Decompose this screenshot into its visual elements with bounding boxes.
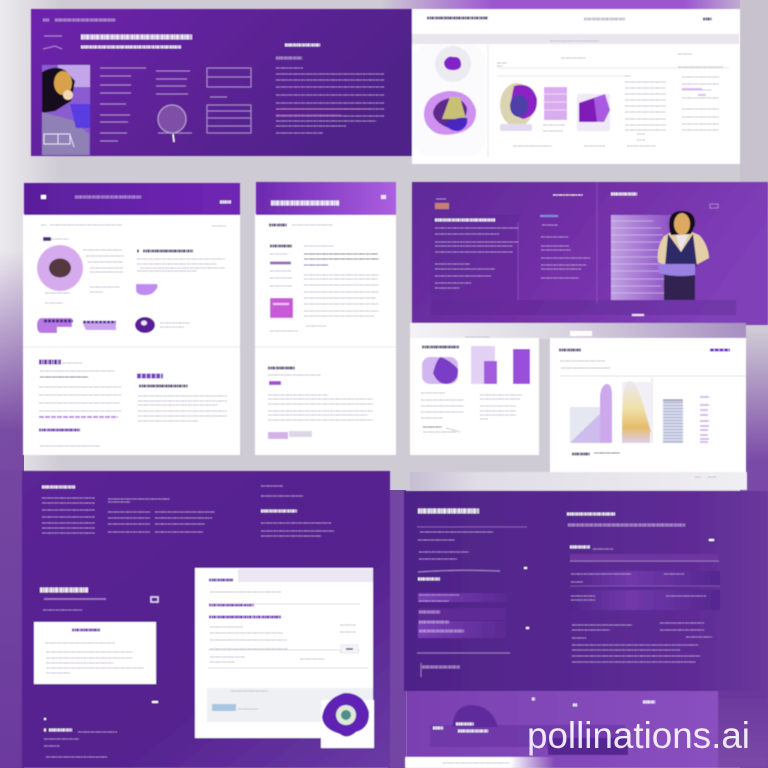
chart: stacked blocks bbox=[543, 87, 567, 131]
form heading bbox=[209, 578, 233, 582]
accent label bbox=[710, 348, 730, 352]
side list bbox=[270, 246, 292, 286]
lavender chips bbox=[268, 431, 312, 439]
figure: person bbox=[658, 211, 709, 300]
card footer bbox=[423, 426, 442, 428]
small tables bbox=[207, 68, 251, 133]
left section text bbox=[39, 387, 121, 411]
chart: purple blob bbox=[422, 357, 458, 384]
panel: white chart report bbox=[550, 338, 746, 477]
card: white form bbox=[195, 568, 373, 738]
right heading bbox=[567, 514, 685, 525]
striped text block bbox=[611, 215, 671, 300]
logo mark bbox=[43, 36, 62, 49]
chart: bars bbox=[471, 346, 530, 384]
left footer bbox=[421, 663, 460, 677]
feature heading bbox=[137, 250, 193, 252]
panel: top-left purple report bbox=[31, 9, 413, 156]
header bar bbox=[24, 183, 240, 215]
right section heading bbox=[137, 376, 188, 386]
header labels bbox=[427, 18, 712, 19]
top label bbox=[43, 18, 115, 22]
text block C bbox=[261, 486, 334, 536]
heading bbox=[81, 34, 192, 40]
panel: bottom-right purple report bbox=[404, 491, 768, 691]
captions bbox=[572, 453, 620, 454]
pager dash bbox=[632, 314, 644, 316]
left heading bbox=[418, 508, 479, 514]
main text bbox=[304, 246, 379, 316]
panel: bottom-left purple report bbox=[22, 471, 390, 768]
strip above charts bbox=[410, 323, 746, 339]
icon: small purple blob bbox=[435, 46, 471, 82]
white card bbox=[405, 757, 555, 768]
left section heading bbox=[39, 362, 115, 377]
form text bbox=[210, 592, 288, 662]
form button bbox=[341, 645, 358, 653]
card: white note bbox=[34, 622, 156, 684]
lens chart bbox=[158, 105, 186, 142]
feature text bbox=[137, 259, 225, 271]
panel: top-right white report bbox=[412, 9, 740, 164]
right bands bbox=[570, 547, 720, 610]
right text bbox=[572, 623, 712, 662]
middle text block bbox=[540, 195, 590, 278]
orange tag bbox=[435, 199, 449, 209]
intro lines bbox=[560, 361, 610, 368]
text block B bbox=[108, 499, 215, 532]
band labels bbox=[433, 699, 655, 731]
text beside circle bbox=[83, 250, 124, 272]
panel: purple report with figure bbox=[412, 182, 768, 325]
chart: yellow peak bbox=[622, 381, 652, 443]
grey strip bbox=[412, 34, 739, 44]
table bbox=[663, 400, 683, 443]
icon: small outline bbox=[710, 204, 718, 208]
inset with purple blob bbox=[321, 693, 374, 748]
icon: dark purple circle bbox=[135, 317, 190, 333]
footer note bbox=[695, 476, 716, 478]
dark circle bbox=[452, 705, 498, 727]
tag bbox=[43, 237, 51, 241]
grey footer band bbox=[207, 688, 373, 722]
footer bbox=[39, 428, 80, 432]
section heading bbox=[40, 590, 106, 610]
watermark: pollinations.ai bbox=[527, 715, 750, 756]
subheading bbox=[81, 46, 181, 48]
left text bbox=[417, 527, 527, 579]
captions bbox=[513, 145, 656, 147]
header bar bbox=[256, 182, 396, 215]
chart: pie blob bbox=[500, 83, 537, 131]
left text block bbox=[435, 220, 518, 288]
card text bbox=[421, 393, 522, 419]
chart: purple wedge bbox=[577, 94, 610, 131]
card heading bbox=[422, 346, 459, 348]
chart: lilac circle bbox=[37, 245, 83, 303]
heading bbox=[559, 348, 581, 352]
right heading bbox=[611, 192, 637, 196]
chart: area peak bbox=[570, 384, 612, 443]
panel: narrow white report bbox=[255, 182, 396, 455]
chart label bbox=[497, 58, 586, 66]
text columns bbox=[100, 68, 192, 141]
icon: large lilac blob bbox=[424, 91, 476, 135]
value column bbox=[700, 397, 709, 442]
portrait photo bbox=[42, 65, 90, 155]
gap below charts bbox=[410, 472, 747, 490]
chip group bbox=[37, 318, 116, 333]
icon: lavender capsule bbox=[136, 284, 158, 295]
right text block bbox=[276, 45, 384, 133]
panel: white chart card bbox=[410, 338, 539, 455]
lower text bbox=[268, 395, 373, 420]
right section text bbox=[138, 396, 227, 421]
small tick bbox=[152, 701, 158, 703]
text block A bbox=[42, 487, 95, 533]
icon: small frame bbox=[151, 597, 158, 602]
lower heading bbox=[268, 368, 321, 383]
footer text bbox=[44, 719, 117, 757]
left bands bbox=[418, 593, 507, 638]
panel: bottom-right lilac band bbox=[405, 691, 768, 768]
pink block bbox=[270, 298, 293, 318]
small ticks bbox=[524, 540, 714, 628]
right text columns bbox=[625, 54, 723, 140]
panel: white report with purple header bbox=[23, 183, 240, 455]
